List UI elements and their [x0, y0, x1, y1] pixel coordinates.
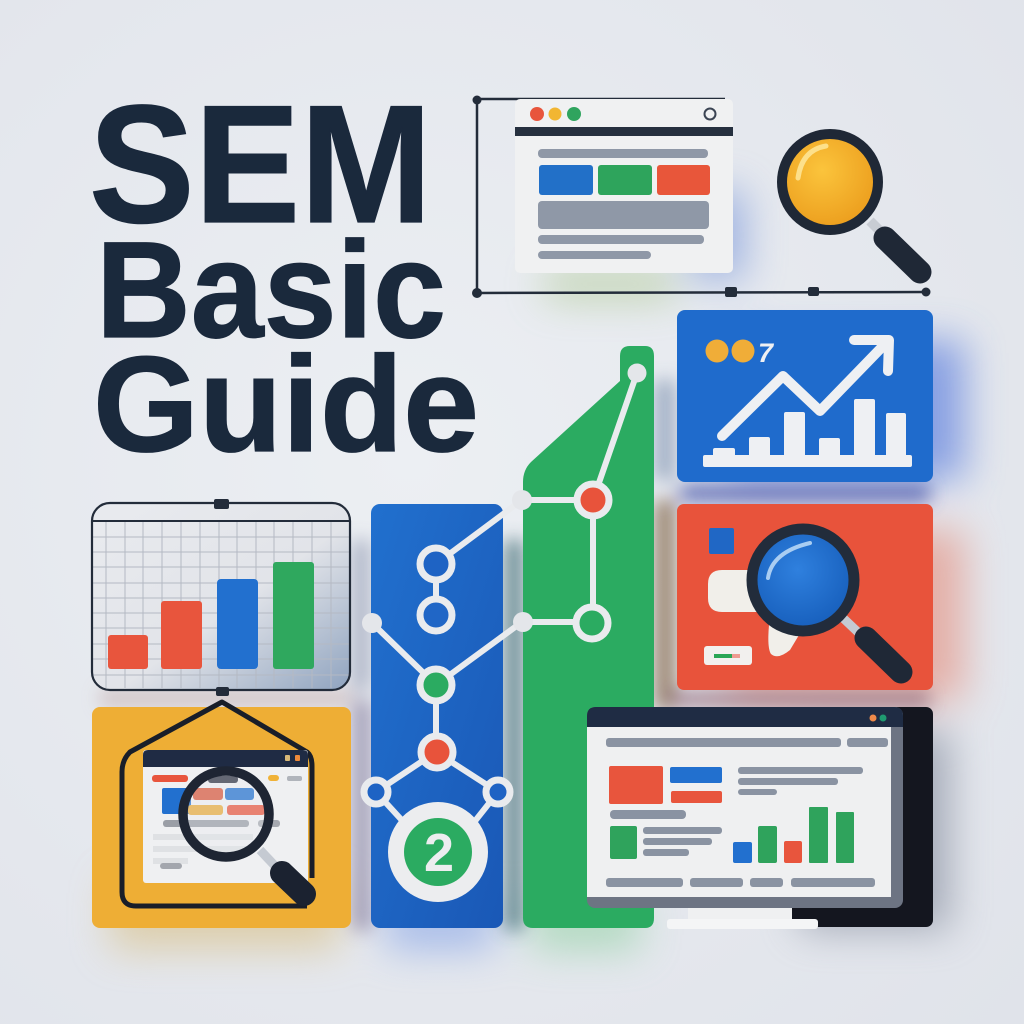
monitor stand [667, 905, 818, 929]
title line: Guide: Guide [93, 328, 479, 480]
panel: red search [677, 504, 933, 690]
title line: SEM: SEM [89, 70, 432, 258]
browser card [515, 99, 733, 273]
icon: dark magnifying glass [183, 771, 304, 894]
numbered badge: 2 [424, 823, 454, 883]
square icon [709, 528, 734, 554]
icon: gold magnifying glass [782, 134, 920, 272]
monitor back [700, 707, 933, 927]
small progress pill [704, 646, 752, 665]
panel: green column [523, 346, 654, 928]
coloured glows [100, 190, 965, 950]
panel: grid bar chart [92, 499, 350, 696]
panel: yellow house search [92, 702, 351, 928]
title line: Basic: Basic [96, 214, 446, 367]
browser window [143, 750, 308, 883]
speech bubble [708, 570, 770, 612]
title [89, 70, 479, 480]
browser window with selection frame [472, 96, 930, 298]
selection frame [472, 96, 930, 298]
numbered badge [388, 802, 488, 902]
icon: blue magnifying glass [752, 529, 901, 672]
panel: blue column [371, 504, 503, 928]
monitor bar chart [733, 807, 854, 863]
node network [362, 364, 646, 902]
monitor dashboard [587, 707, 933, 929]
panel: blue growth chart: 7 [758, 338, 775, 368]
panel: blue growth chart [677, 310, 933, 482]
bars [108, 635, 148, 669]
monitor body [587, 707, 903, 908]
